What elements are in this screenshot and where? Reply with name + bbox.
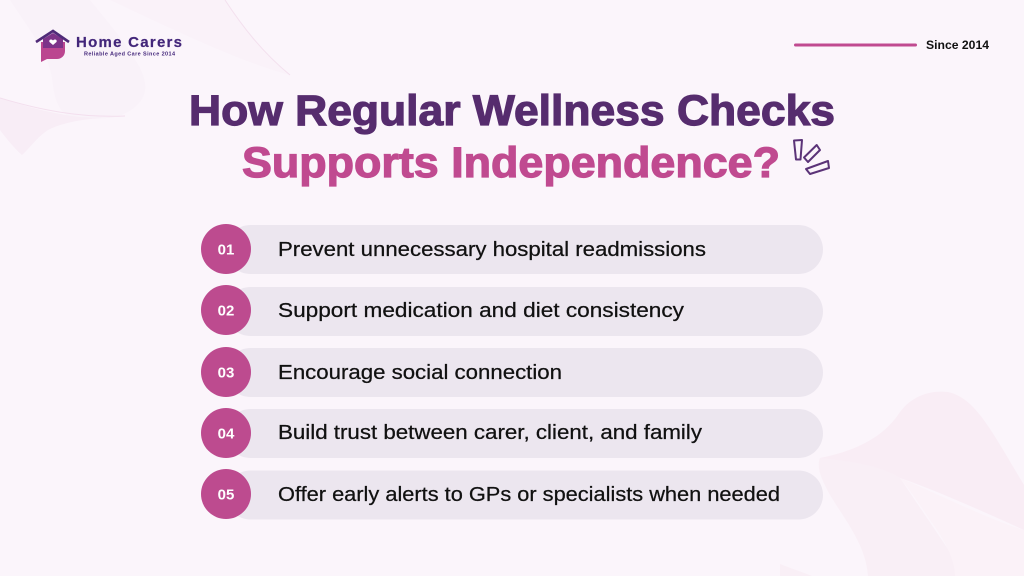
item 01: 01 (218, 242, 234, 258)
item 05: Offer early alerts to GPs or specialists when needed (278, 484, 780, 506)
tagline: Reliable Aged Care Since 2014 (84, 52, 176, 58)
item 05 (201, 469, 823, 520)
item 03 (201, 347, 823, 397)
item 04: Build trust between carer, client, and family (278, 422, 702, 444)
item 02: Support medication and diet consistency (278, 300, 684, 322)
item 02 (201, 285, 823, 336)
decorative wave: bottom right ribbons (780, 392, 1024, 576)
item 02: 02 (218, 302, 234, 320)
item 01 (201, 224, 823, 274)
item 04: 04 (218, 426, 235, 442)
item 01: Prevent unnecessary hospital readmissions (278, 239, 706, 261)
icon: emphasis marks (794, 140, 829, 174)
item 05: 05 (218, 486, 234, 504)
decorative wave: top left ribbons (0, 0, 290, 155)
since 2014 tag: Since 2014 (926, 40, 990, 52)
list (201, 224, 823, 520)
item 03: Encourage social connection (278, 362, 562, 384)
title (189, 87, 835, 187)
item 04 (201, 408, 823, 458)
logo (36, 31, 182, 62)
title: How Regular Wellness Checks (189, 87, 835, 135)
icon: house speech bubble (36, 31, 69, 62)
brand name: Home Carers (76, 34, 182, 51)
title: Supports Independence? (242, 139, 780, 187)
since 2014 tag (794, 40, 990, 52)
item 03: 03 (218, 364, 234, 382)
